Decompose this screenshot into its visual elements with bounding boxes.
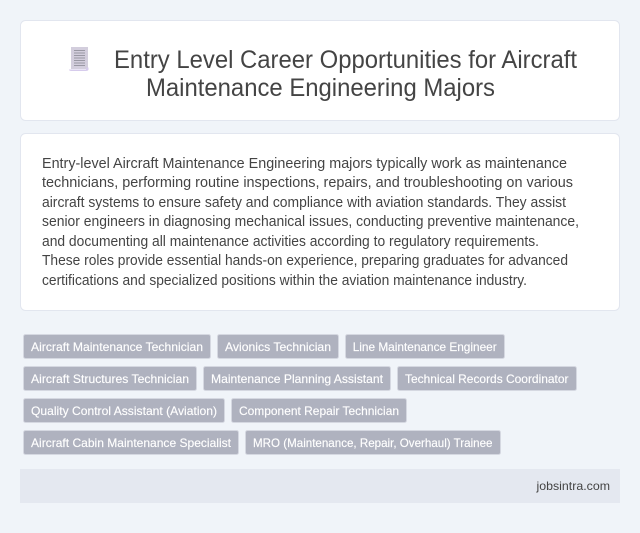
tags: career roles [24, 334, 576, 454]
tag [24, 366, 196, 390]
tag: Aircraft Maintenance Technician [31, 340, 203, 354]
text block: description: aircraft systems to ensure safety and compliance with aviation standards. They assist [42, 195, 566, 211]
tag [218, 334, 338, 358]
panel: title card [20, 20, 620, 120]
tag [346, 334, 504, 358]
title: Maintenance Engineering Majors [146, 74, 495, 102]
tag [24, 398, 224, 422]
footer bar [20, 469, 620, 503]
text block: description [42, 156, 579, 289]
panel: description [20, 134, 620, 310]
text block: description: technicians, performing routine inspections, repairs, and troubleshooting on various [42, 175, 573, 191]
tag [232, 398, 406, 422]
icon: document scroll [69, 47, 88, 71]
title: Entry Level Career Opportunities for Aircraft [114, 46, 577, 74]
text block: description: These roles provide essential hands-on experience, preparing graduates for advanced [42, 253, 568, 269]
tag [398, 366, 576, 390]
tag [24, 334, 210, 358]
tag: Avionics Technician [225, 340, 331, 354]
footer source text: jobsintra.com [535, 479, 610, 493]
tag [24, 430, 238, 454]
tag: Maintenance Planning Assistant [211, 372, 384, 386]
tag: Line Maintenance Engineer [353, 340, 497, 354]
tag: MRO (Maintenance, Repair, Overhaul) Trainee [253, 436, 493, 450]
tag: Aircraft Cabin Maintenance Specialist [31, 436, 232, 450]
tag: Technical Records Coordinator [405, 372, 568, 386]
text block: description: senior engineers in diagnosing mechanical issues, conducting preventive maintenance, [42, 214, 579, 230]
text block: description: Entry-level Aircraft Maintenance Engineering majors typically work as maintenance [42, 156, 567, 172]
text block: description: certifications and specialized positions within the aviation maintenance industry. [42, 273, 527, 289]
tag [246, 430, 500, 454]
tag [204, 366, 390, 390]
tag: Aircraft Structures Technician [31, 372, 189, 386]
tag: Component Repair Technician [239, 404, 399, 418]
title [114, 46, 577, 102]
tag: Quality Control Assistant (Aviation) [31, 404, 217, 418]
text block: description: and documenting all maintenance activities according to regulatory requirements. [42, 234, 539, 250]
